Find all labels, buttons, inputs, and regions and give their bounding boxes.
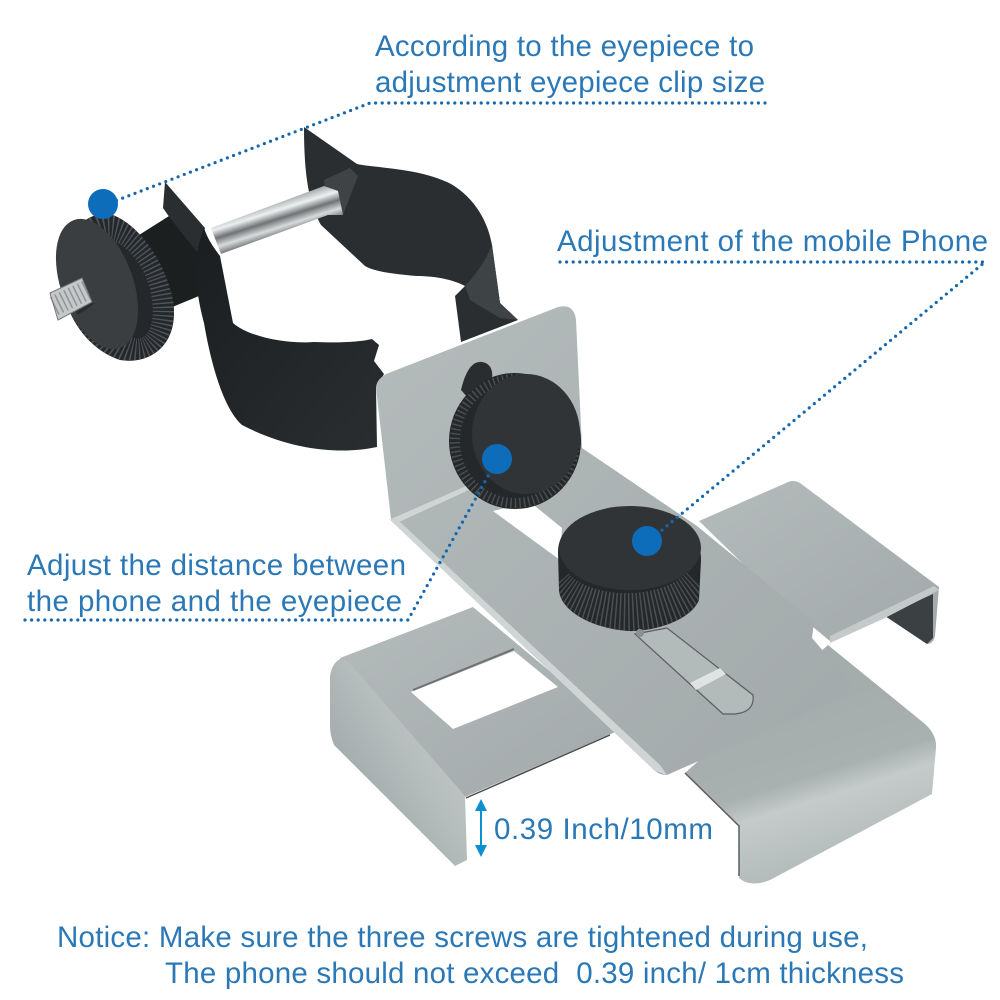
left knob — [49, 215, 174, 361]
product photo: phone adapter — [40, 127, 939, 884]
lower left clip — [330, 607, 620, 866]
rear band — [304, 127, 518, 342]
front band — [163, 182, 205, 252]
notice text — [57, 921, 904, 990]
callout: mobile phone adjustment — [557, 225, 988, 556]
lower right clip — [685, 645, 936, 884]
notice text: Notice: Make sure the three screws are tightened during use, — [57, 921, 868, 954]
callout: mobile phone adjustment: Adjustment of the mobile Phone — [557, 225, 988, 258]
callout: distance adjustment: the phone and the eyepiece — [27, 585, 402, 618]
lower knob — [550, 506, 705, 637]
black eyepiece clamp — [139, 127, 518, 451]
notice text: The phone should not exceed 0.39 inch/ 1cm thickness — [165, 957, 904, 990]
callout: eyepiece clip: adjustment eyepiece clip size — [375, 66, 765, 99]
dimension label with arrow: 0.39 Inch/10mm — [494, 813, 713, 846]
callout: distance adjustment: Adjust the distance between — [27, 549, 406, 582]
callout: distance adjustment — [25, 444, 512, 620]
threaded bolt — [324, 168, 358, 215]
back right clip — [699, 481, 939, 644]
callout: eyepiece clip — [88, 30, 765, 219]
silver sliding plate — [376, 306, 850, 775]
middle knob — [449, 373, 581, 509]
collar — [139, 211, 204, 308]
dimension label with arrow — [475, 799, 713, 857]
callout: eyepiece clip: According to the eyepiece to — [375, 30, 754, 63]
